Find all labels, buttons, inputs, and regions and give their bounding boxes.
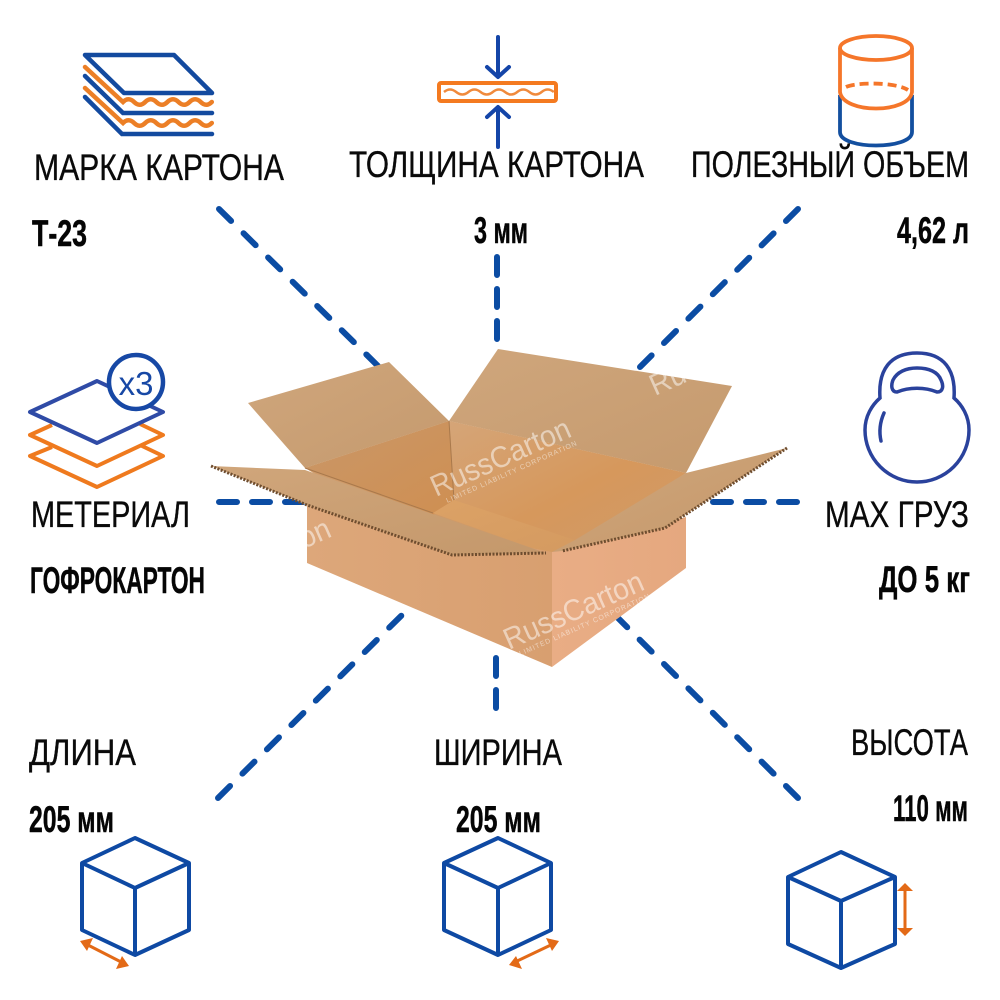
icon: corrugated layers bbox=[85, 55, 212, 134]
watermark: inner: LIMITED LIABILITY CORPORATION bbox=[445, 441, 578, 505]
watermark: front: RussCarton bbox=[498, 565, 649, 656]
value: length: 205 мм bbox=[29, 799, 114, 840]
left front flap bbox=[211, 466, 546, 555]
box floor bbox=[433, 500, 575, 553]
icon: cube with length arrow bbox=[80, 838, 189, 969]
corrugated flap edges bbox=[211, 448, 787, 555]
icon: three material layers bbox=[30, 355, 163, 487]
icon: three material layers: x3 bbox=[119, 365, 153, 402]
dashed connector lines bbox=[218, 209, 798, 798]
watermark: inner: RussCarton bbox=[425, 412, 576, 503]
icon: cube with width arrow bbox=[444, 838, 559, 969]
back right flap bbox=[449, 349, 732, 473]
icon: kettlebell bbox=[865, 353, 969, 482]
heading: material: МЕТЕРИАЛ bbox=[31, 494, 190, 535]
value: width: 205 мм bbox=[456, 799, 541, 840]
icon: cube with height arrow bbox=[788, 852, 913, 968]
heading: width: ШИРИНА bbox=[434, 732, 562, 773]
watermark: left side: RussCarton bbox=[185, 512, 336, 603]
heading: cardboard grade: МАРКА КАРТОНА bbox=[34, 147, 284, 188]
right front flap bbox=[552, 448, 787, 552]
illustration: open cardboard box bbox=[210, 349, 788, 667]
fold lines bbox=[305, 421, 454, 513]
heading: thickness: ТОЛЩИНА КАРТОНА bbox=[349, 144, 644, 185]
heading: max load: МАХ ГРУЗ bbox=[825, 494, 969, 535]
outer left side bbox=[307, 505, 552, 667]
value: thickness: 3 мм bbox=[474, 210, 528, 251]
box interior base bbox=[305, 421, 686, 556]
outer right side bbox=[552, 517, 686, 667]
heading: length: ДЛИНА bbox=[29, 732, 136, 773]
value: cardboard grade: Т-23 bbox=[32, 213, 87, 254]
value: material: ГОФРОКАРТОН bbox=[30, 560, 205, 601]
value: useful volume: 4,62 л bbox=[897, 210, 969, 251]
icon: cardboard thickness bbox=[439, 37, 556, 147]
watermark: front: LIMITED LIABILITY CORPORATION bbox=[518, 594, 651, 658]
icon: cylinder volume bbox=[840, 36, 912, 146]
inner right wall bbox=[449, 421, 686, 545]
inner left wall bbox=[305, 421, 454, 515]
watermark: back flap: RussCarton bbox=[644, 311, 795, 402]
back left flap bbox=[248, 362, 449, 468]
